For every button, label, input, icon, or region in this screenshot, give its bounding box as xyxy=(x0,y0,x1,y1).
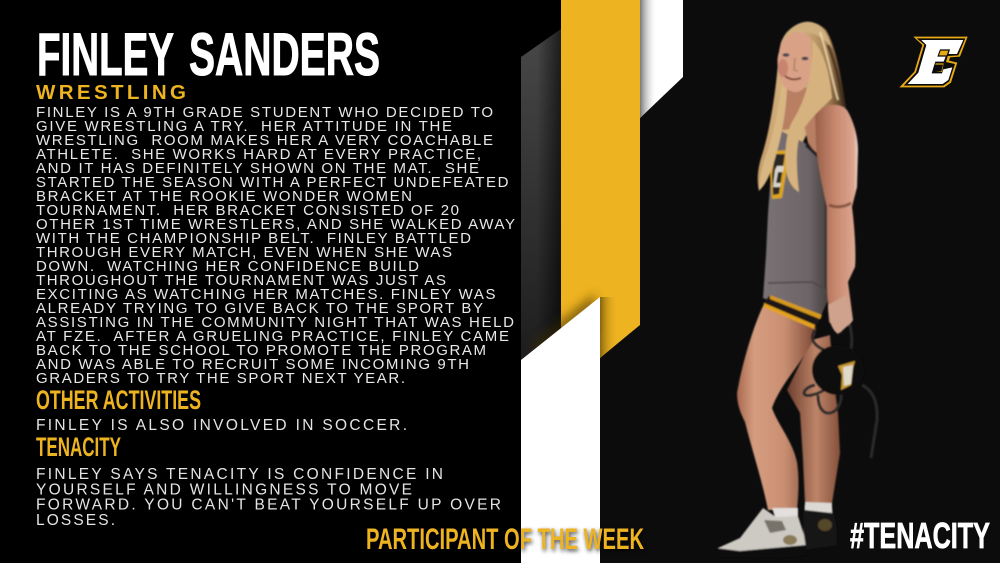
caption: participant of the week xyxy=(366,523,645,558)
text block: biography xyxy=(36,104,515,387)
hand fingers xyxy=(828,295,853,334)
title: athlete name: SANDERS xyxy=(189,21,380,88)
eye right xyxy=(802,57,808,60)
graphic: dark grey angled bar xyxy=(521,29,561,370)
text block: biography: WRESTLING ROOM MAKES HER A VERY COACHABLE xyxy=(36,132,493,149)
graphic: gold angled bar xyxy=(561,0,640,358)
text block: biography: EXCITING AS WATCHING HER MATCHES. FINLEY WAS xyxy=(36,286,495,303)
text block: biography: BRACKET AT THE ROOKIE WONDER WOMEN xyxy=(36,188,412,205)
text block: biography: AT FZE. AFTER A GRUELING PRACTICE, FINLEY CAME xyxy=(36,328,509,345)
text block: tenacity quote: LOSSES. xyxy=(36,512,115,529)
singlet neckline xyxy=(806,145,819,157)
front sock xyxy=(772,508,798,520)
heading: tenacity: TENACITY xyxy=(36,432,121,462)
shoe dark panel xyxy=(764,520,786,533)
shorts seam xyxy=(825,200,827,290)
arm xyxy=(815,105,858,333)
headgear logo xyxy=(838,361,855,390)
nose xyxy=(794,58,798,71)
singlet logo E xyxy=(770,150,790,199)
text block: biography: AND WAS ABLE TO RECRUIT SOME INCOMING 9TH xyxy=(36,356,469,373)
arm shadow at elbow xyxy=(829,203,851,207)
background: dark right panel xyxy=(600,0,1000,563)
back leg xyxy=(787,335,840,503)
shoe gold badge xyxy=(783,535,797,545)
eye left xyxy=(782,53,790,57)
singlet xyxy=(763,131,829,318)
headgear shell xyxy=(812,345,864,395)
heading: other activities: OTHER ACTIVITIES xyxy=(36,385,201,415)
graphic: white upper angled bar xyxy=(640,0,683,118)
skin chest and neck xyxy=(782,85,817,155)
text block: tenacity quote: FORWARD. YOU CAN'T BEAT YOURSELF UP OVER xyxy=(36,496,501,514)
headgear straps xyxy=(804,325,877,458)
hair back xyxy=(758,22,846,192)
text block: biography: GIVE WRESTLING A TRY. HER ATTITUDE IN THE xyxy=(36,118,452,135)
title: athlete name xyxy=(37,21,380,88)
front leg xyxy=(737,306,816,510)
logo: E mark xyxy=(899,37,968,87)
front shoe sole xyxy=(716,545,807,558)
text block: biography: BACK TO THE SCHOOL TO PROMOTE THE PROGRAM xyxy=(36,342,486,359)
photo: wrestler holding headgear xyxy=(716,22,877,558)
text block: biography: DOWN. WATCHING HER CONFIDENCE BUILD xyxy=(36,258,419,275)
front hair strand over chest xyxy=(785,40,832,192)
front shoe xyxy=(718,508,806,552)
hair top xyxy=(780,22,832,48)
text block: tenacity quote: YOURSELF AND WILLINGNESS TO MOVE xyxy=(36,481,412,498)
text block: biography: ATHLETE. SHE WORKS HARD AT EVERY PRACTICE, xyxy=(36,146,481,163)
hair left strands xyxy=(759,50,787,190)
singlet leg trim xyxy=(763,295,822,329)
face xyxy=(777,31,812,92)
text block: biography: THROUGHOUT THE TOURNAMENT WAS JUST AS xyxy=(36,272,446,289)
text block: biography: STARTED THE SEASON WITH A PERFECT UNDEFEATED xyxy=(36,174,509,191)
face shadow cheek xyxy=(778,59,788,77)
text block: biography: THROUGH EVERY MATCH, EVEN WHEN SHE WAS xyxy=(36,244,452,261)
caption: participant of the week: PARTICIPANT OF THE WEEK xyxy=(367,525,645,558)
text block: biography: FINLEY IS A 9TH GRADE STUDENT WHO DECIDED TO xyxy=(36,104,493,121)
graphic: white lower angled bar xyxy=(521,293,600,563)
text block: tenacity quote xyxy=(36,466,501,529)
text block: biography: GRADERS TO TRY THE SPORT NEXT YEAR. xyxy=(36,370,405,387)
text block: biography: ASSISTING IN THE COMMUNITY NIGHT THAT WAS HELD xyxy=(36,314,514,331)
hair highlight xyxy=(820,32,838,100)
back shoe xyxy=(803,505,837,550)
text block: biography: AND IT HAS DEFINITELY SHOWN ON THE MAT. SHE xyxy=(36,160,479,177)
caption: participant of the week: PARTICIPANT OF THE WEEK xyxy=(366,523,644,556)
text: other activities: FINLEY IS ALSO INVOLVED IN SOCCER. xyxy=(36,417,407,434)
text block: biography: ALREADY TRYING TO GIVE BACK TO THE SPORT BY xyxy=(36,300,483,317)
text block: biography: TOURNAMENT. HER BRACKET CONSISTED OF 20 xyxy=(36,202,459,219)
hair shadow xyxy=(828,45,844,106)
sock on back foot xyxy=(805,502,832,513)
heading: sport: WRESTLING xyxy=(36,81,186,104)
text block: biography: OTHER 1ST TIME WRESTLERS, AND SHE WALKED AWAY xyxy=(36,216,515,233)
mouth xyxy=(785,76,801,79)
headgear logo centre xyxy=(843,365,853,386)
text block: tenacity quote: FINLEY SAYS TENACITY IS CONFIDENCE IN xyxy=(36,466,443,483)
text block: biography: WITH THE CHAMPIONSHIP BELT. FINLEY BATTLED xyxy=(36,230,471,247)
back shoe gold pattern xyxy=(818,519,832,531)
shorts panel line xyxy=(768,282,826,290)
title: athlete name: FINLEY xyxy=(37,21,174,88)
